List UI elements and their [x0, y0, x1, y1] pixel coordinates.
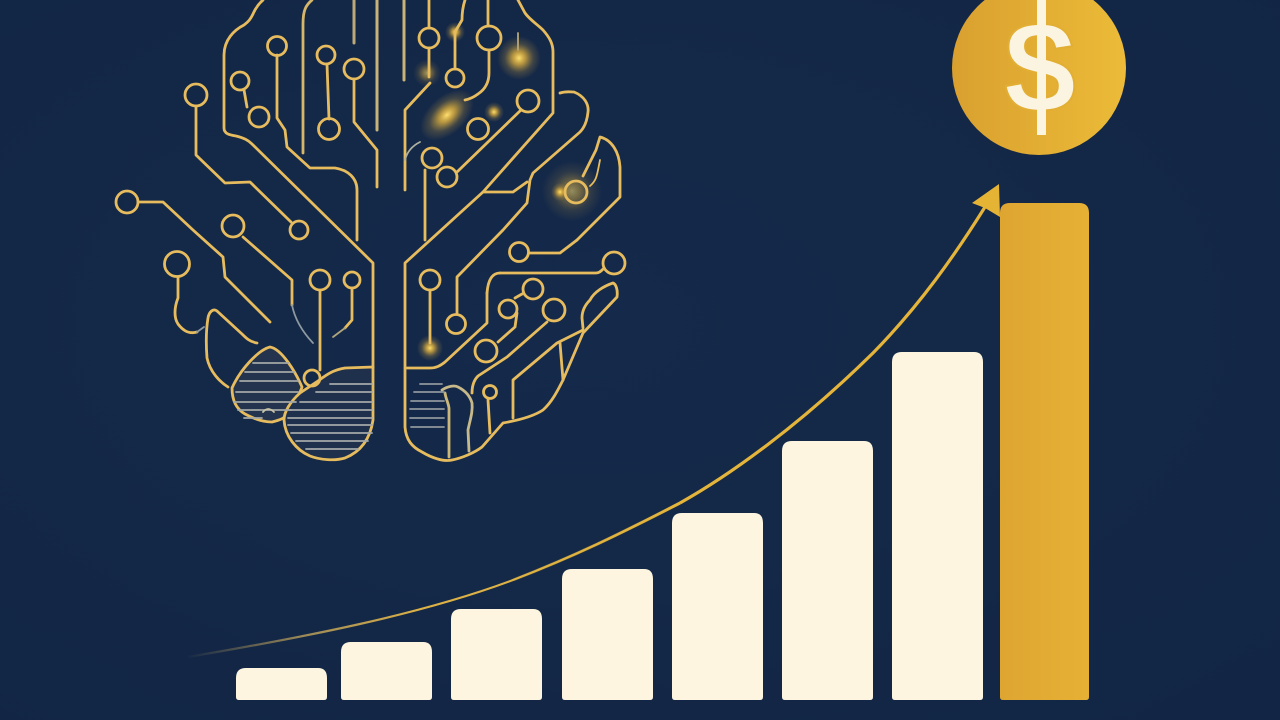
- glow spots on the brain: [411, 22, 602, 361]
- left hemisphere shaded lobes: [232, 347, 373, 460]
- gold bar: [1000, 203, 1089, 700]
- stripes in right lobe: [410, 384, 444, 427]
- bar chart: [236, 203, 1089, 700]
- right hemisphere circuit traces: [404, 0, 625, 461]
- dollar coin: [952, 0, 1126, 155]
- brain circuit illustration: [116, 0, 625, 461]
- left hemisphere circuit traces: [116, 0, 377, 387]
- growth arrow: [188, 184, 1000, 657]
- coin disc: [952, 0, 1126, 155]
- stripes in left lobes: [234, 363, 372, 449]
- arrow head: [972, 184, 1000, 217]
- cream bars: [236, 352, 983, 700]
